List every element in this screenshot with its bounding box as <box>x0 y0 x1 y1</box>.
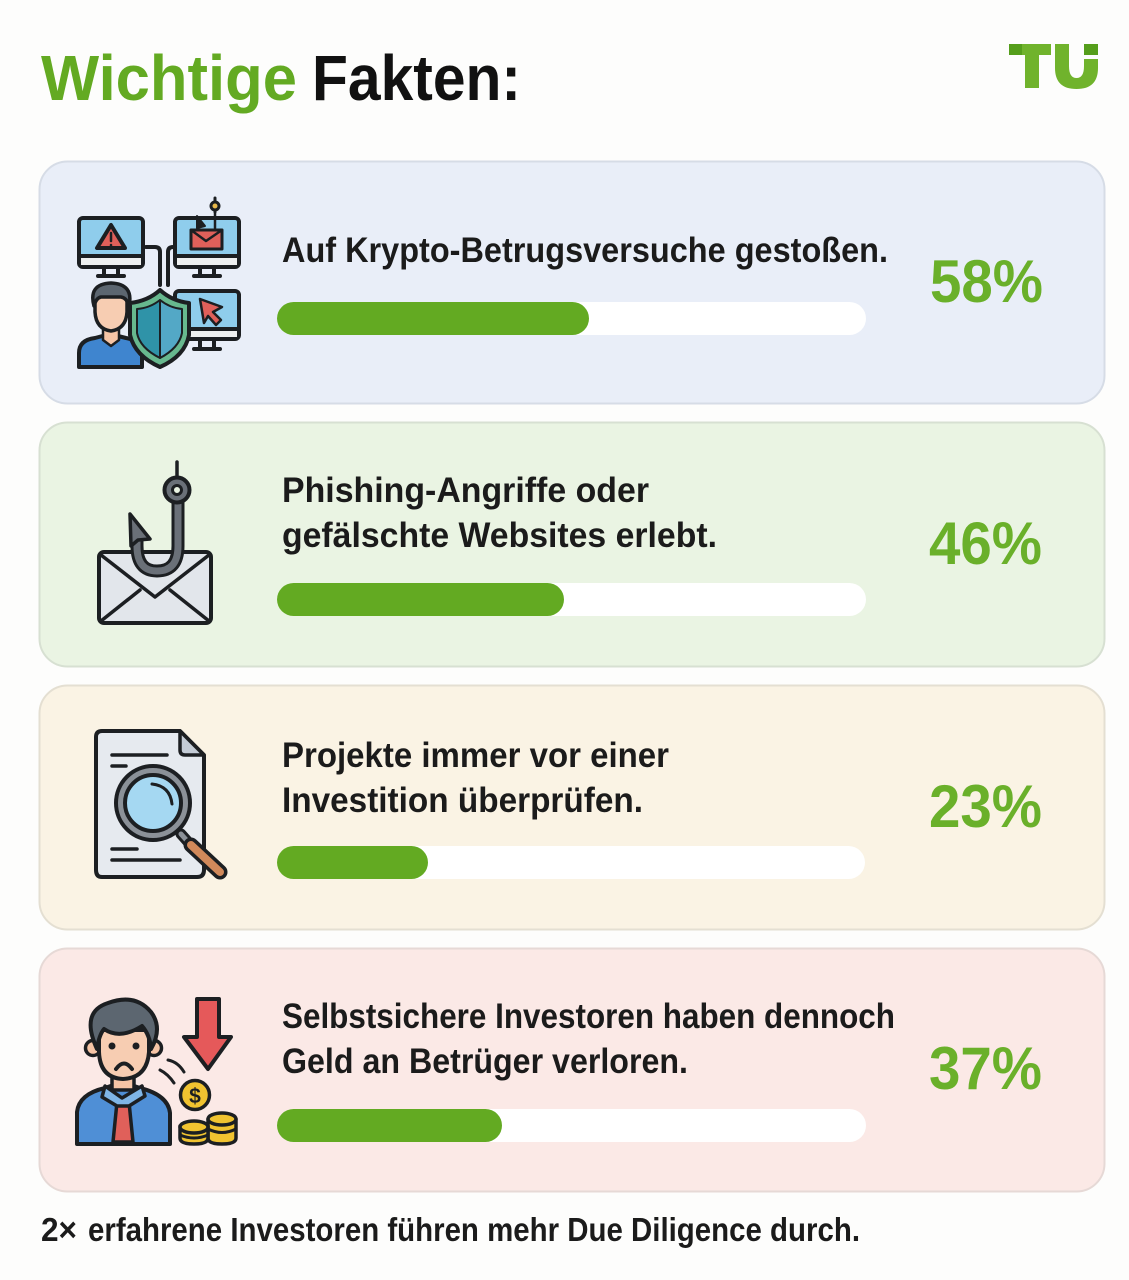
progress bar <box>277 583 866 616</box>
panel: confident investors <box>40 948 1104 1192</box>
label: Investition überprüfen. <box>282 781 643 820</box>
label: Phishing-Angriffe oder <box>282 471 649 510</box>
icon: hook and envelope <box>99 462 211 623</box>
title: Fakten: <box>312 42 521 114</box>
value: 23% <box>929 773 1042 840</box>
progress bar <box>277 1109 866 1142</box>
value: 46% <box>929 510 1042 577</box>
label: gefälschte Websites erlebt. <box>282 516 717 555</box>
footer note: erfahrene Investoren führen mehr Due Diligence durch. <box>88 1211 860 1248</box>
logo: TU <box>1009 44 1098 89</box>
panel: phishing <box>40 422 1104 666</box>
title: Wichtige <box>41 42 297 114</box>
panel background <box>40 422 1104 666</box>
panel: project review <box>40 686 1104 930</box>
icon: document and magnifier <box>96 731 220 877</box>
progress bar <box>277 846 865 879</box>
icon: worried investor with falling money <box>77 999 236 1144</box>
label <box>282 997 895 1081</box>
value: 37% <box>929 1035 1042 1102</box>
footer note: 2× <box>41 1211 77 1248</box>
panel background <box>40 948 1104 1192</box>
label <box>282 736 669 820</box>
panel background <box>40 686 1104 930</box>
label: Geld an Betrüger verloren. <box>282 1042 688 1081</box>
value: 58% <box>930 248 1043 315</box>
label: Auf Krypto-Betrugsversuche gestoßen. <box>282 231 888 270</box>
panel: crypto scam attempts <box>40 162 1104 404</box>
title <box>41 42 521 114</box>
icon: monitors, person and shield <box>79 198 239 367</box>
progress bar <box>277 302 866 335</box>
label <box>282 471 717 555</box>
panel background <box>40 162 1104 404</box>
label: Projekte immer vor einer <box>282 736 669 775</box>
icon: worried investor with falling money: $ <box>189 1085 201 1108</box>
label: Selbstsichere Investoren haben dennoch <box>282 997 895 1036</box>
